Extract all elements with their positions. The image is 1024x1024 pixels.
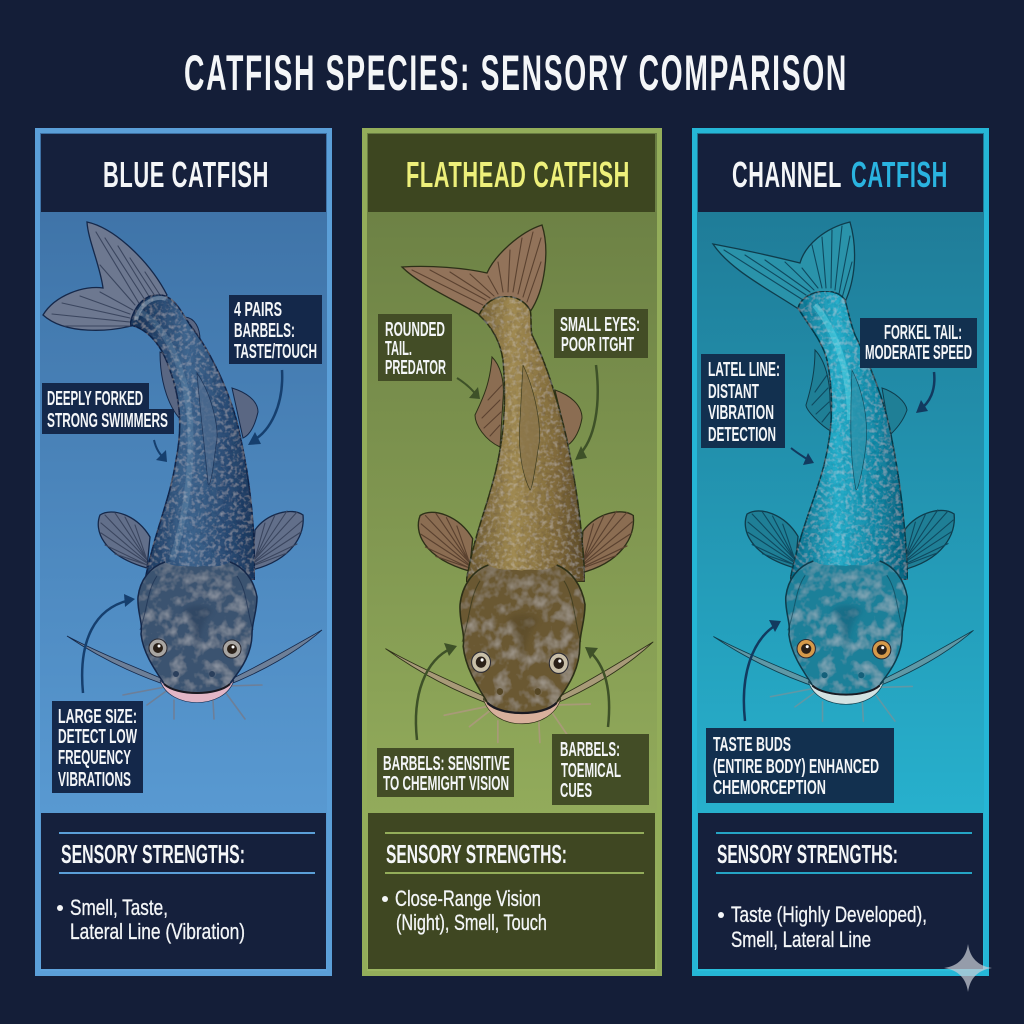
flathead catfish illustration [386,225,653,742]
arrow: small eyes [575,365,598,460]
callout: large size [52,701,143,793]
channel sensory strengths: Taste (Highly Developed), [731,902,927,927]
callout: rounded tail: PREDATOR [385,357,446,379]
channel sensory strengths: SENSORY STRENGTHS: [717,839,898,869]
flathead sensory strengths: SENSORY STRENGTHS: [386,839,567,869]
callout: forked tail: DEEPLY FORKED [47,388,143,410]
arrow: right barbels [585,647,609,727]
callout: taste buds: CHEMORCEPTION [713,777,826,799]
callout: barbels sensitive: BARBELS: SENSITIVE [383,753,510,775]
callout: lateral line: DISTANT [708,381,759,403]
channel catfish illustration [713,222,974,721]
callout: taste buds [706,728,894,803]
callout: barbels: 4 PAIRS [234,299,282,321]
flathead header: FLATHEAD CATFISH [406,154,630,195]
callout: lateral line: LATEL LINE: [708,359,780,381]
panel: blue catfish [38,130,330,974]
callout: forked tail: STRONG SWIMMERS [47,410,168,432]
blue sensory strengths: Smell, Taste, [70,895,168,920]
channel header: CATFISH [851,154,948,195]
blue sensory strengths [41,813,326,969]
channel sensory strengths [698,813,983,969]
callout: rounded tail [378,314,452,381]
callout: rounded tail: TAIL. [385,338,412,360]
channel header [698,134,983,212]
arrow: taste buds [744,620,781,721]
callout: small eyes: SMALL EYES: [560,314,640,336]
flathead sensory strengths [368,813,655,969]
blue sensory strengths: Lateral Line (Vibration) [70,919,245,944]
callout: large size: DETECT LOW [58,726,137,748]
callout: small eyes: POOR ITGHT [561,334,634,356]
blue header: BLUE CATFISH [103,154,269,195]
flathead header [368,134,655,212]
panel: channel catfish [694,130,986,974]
callout: lateral line: VIBRATION [708,402,774,424]
channel sensory strengths: Smell, Lateral Line [731,927,871,952]
icon: sparkle watermark [944,944,992,992]
panel: flathead catfish [364,130,660,974]
blue sensory strengths: SENSORY STRENGTHS: [61,839,245,869]
callout: barbels chemical: BARBELS: [560,739,620,761]
callout: barbels [229,295,322,364]
callout: forked tail [860,318,977,368]
arrow: barbels [248,370,282,445]
arrow: lateral line [791,448,814,465]
arrow: large size [82,594,135,693]
flathead sensory strengths: (Night), Smell, Touch [396,910,547,935]
arrow: forked tail [154,440,167,462]
channel header: CHANNEL [732,154,842,195]
callout: large size: LARGE SIZE: [58,706,137,728]
callout: large size: FREQUENCY [58,747,131,769]
callout: large size: VIBRATIONS [58,769,131,791]
flathead sensory strengths: Close-Range Vision [395,886,541,911]
callout: barbels sensitive [377,748,514,797]
arrow: rounded tail [457,378,480,399]
callout: lateral line: DETECTION [708,424,776,446]
callout: barbels sensitive: TO CHEMIGHT VISION [383,773,509,795]
callout: barbels: BARBELS: [234,320,295,342]
arrow: forked tail [916,372,934,413]
callout: rounded tail: ROUNDED [385,319,445,341]
callout: barbels chemical: TOEMICAL [561,760,621,782]
callout: barbels: TASTE/TOUCH [234,341,317,363]
callout: forked tail: FORKEL TAIL: [884,322,962,344]
blue catfish illustration [43,222,322,719]
callout: taste buds: TASTE BUDS [713,734,791,756]
blue header [41,134,326,212]
callout: small eyes [554,309,648,358]
callout: lateral line [701,354,785,448]
callout: barbels chemical: CUES [560,780,592,802]
callout: taste buds: (ENTIRE BODY) ENHANCED [713,756,879,778]
callout: barbels chemical [552,734,649,805]
callout: forked tail [42,383,174,434]
arrow: left barbels [416,643,457,740]
